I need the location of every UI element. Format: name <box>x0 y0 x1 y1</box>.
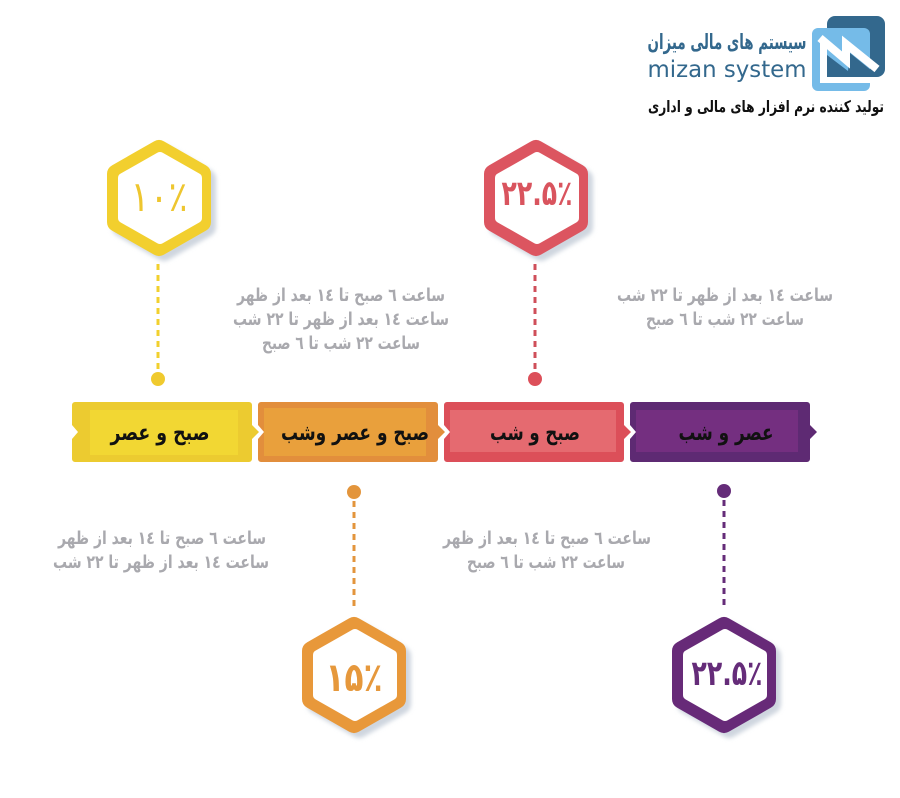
line 2: ساعت ١٤ بعد از ظهر تا ٢٢ شب <box>233 309 449 330</box>
logo Latin name: mizan system <box>648 57 806 83</box>
banner: afternoon and night <box>630 402 817 462</box>
line 1: ساعت ٦ صبح تا ١٤ بعد از ظهر <box>442 528 651 549</box>
dashed connector <box>722 500 726 608</box>
line 1: ساعت ٦ صبح تا ١٤ بعد از ظهر <box>236 285 445 306</box>
icon: purple hexagon <box>682 627 771 728</box>
dot <box>151 372 165 386</box>
banner label: صبح و عصر وشب <box>281 421 429 446</box>
dot <box>347 485 361 499</box>
line 1: ساعت ٦ صبح تا ١٤ بعد از ظهر <box>57 528 266 549</box>
line 3: ساعت ٢٢ شب تا ٦ صبح <box>262 333 420 354</box>
logo Persian name: سیستم های مالی میزان <box>648 30 806 54</box>
dashed connector <box>352 501 356 609</box>
banner: morning, afternoon and night <box>258 402 445 462</box>
text: afternoon and night <box>617 285 833 330</box>
banner label: صبح و عصر <box>110 421 210 446</box>
percentage 22.5: ۲۲.۵٪ <box>502 174 572 214</box>
panel: afternoon and night 22.5% <box>682 484 771 728</box>
panel: morning and afternoon 10% <box>117 150 206 386</box>
dot <box>717 484 731 498</box>
percentage 15: ۱۵٪ <box>326 655 382 701</box>
dot <box>528 372 542 386</box>
logo: Mizan System <box>648 16 885 116</box>
panel: morning and night 22.5% <box>494 150 583 386</box>
banner: morning and afternoon <box>72 402 259 462</box>
percentage 10: ۱۰٪ <box>130 172 188 221</box>
icon: logo mark <box>812 16 885 91</box>
icon: orange hexagon <box>312 627 401 728</box>
line 2: ساعت ٢٢ شب تا ٦ صبح <box>646 309 804 330</box>
percentage 22.5: ۲۲.۵٪ <box>692 654 762 694</box>
banner label: عصر و شب <box>678 421 774 446</box>
text: morning and afternoon shifts <box>53 528 269 573</box>
icon: red hexagon <box>494 150 583 251</box>
panel: three shifts 15% <box>312 485 401 728</box>
banner: morning and night <box>444 402 631 462</box>
dashed connector <box>156 264 160 372</box>
text: three shifts <box>233 285 449 354</box>
dashed connector <box>534 264 536 372</box>
banner label: صبح و شب <box>490 421 580 446</box>
line 1: ساعت ١٤ بعد از ظهر تا ٢٢ شب <box>617 285 833 306</box>
icon: yellow hexagon <box>117 150 206 251</box>
line 2: ساعت ٢٢ شب تا ٦ صبح <box>467 552 625 573</box>
text: morning and night shifts <box>442 528 651 573</box>
line 2: ساعت ١٤ بعد از ظهر تا ٢٢ شب <box>53 552 269 573</box>
